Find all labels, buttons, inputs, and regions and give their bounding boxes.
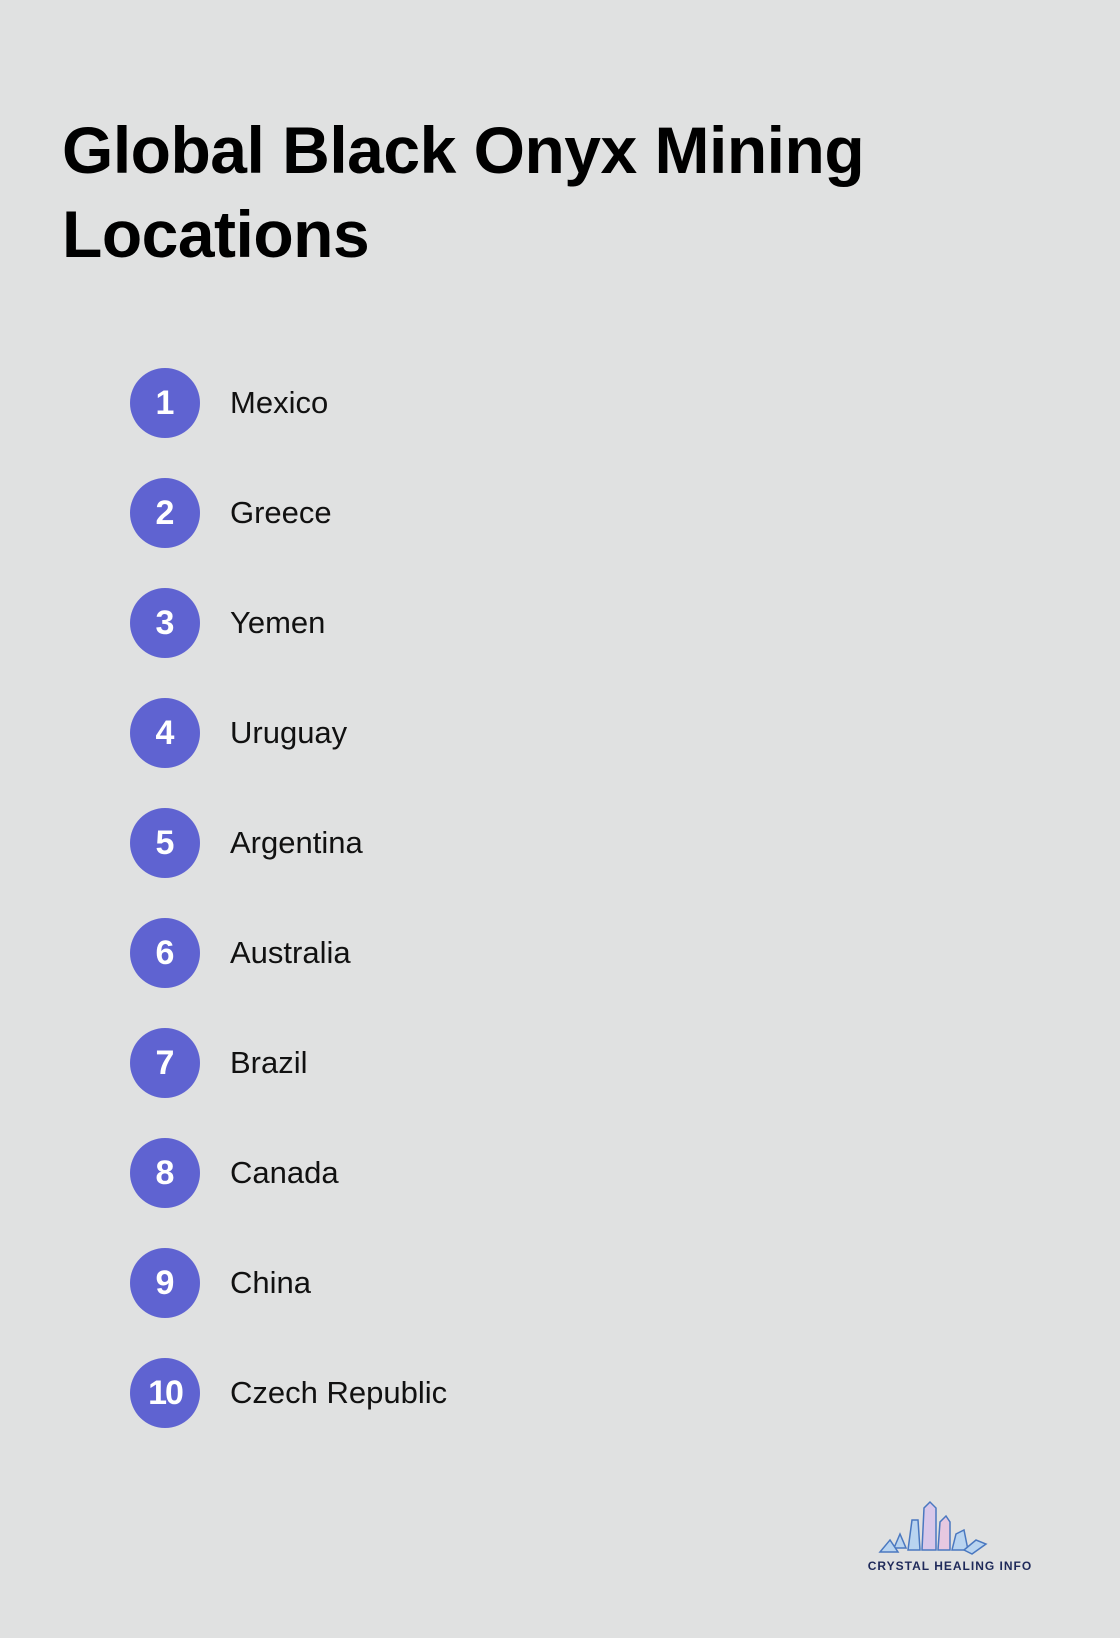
list item 5: Argentina: [230, 825, 363, 860]
list item 3: 3: [156, 604, 174, 642]
list item 6: 6: [156, 934, 174, 972]
list item 2: [130, 478, 332, 548]
list item 3: [130, 588, 325, 658]
list item 1: [130, 368, 328, 438]
logo: crystal healing info: [868, 1501, 1032, 1573]
list item 10: 10: [148, 1374, 182, 1412]
list item 8: 8: [156, 1154, 174, 1192]
list item 4: [130, 698, 347, 768]
list item 7: [130, 1028, 308, 1098]
list item 7: Brazil: [230, 1045, 308, 1080]
list item 9: 9: [156, 1264, 174, 1302]
list item 10: Czech Republic: [230, 1375, 447, 1410]
list item 1: 1: [156, 384, 174, 422]
list item 10: [130, 1358, 447, 1428]
list item 9: [130, 1248, 311, 1318]
list item 6: Australia: [230, 935, 351, 970]
title: [62, 113, 864, 271]
list item 7: 7: [156, 1044, 174, 1082]
title: Locations: [62, 197, 369, 271]
list item 5: 5: [156, 824, 174, 862]
list item 5: [130, 808, 363, 878]
list item 1: Mexico: [230, 385, 328, 420]
logo: crystal healing info: CRYSTAL HEALING INFO: [868, 1559, 1032, 1573]
list item 6: [130, 918, 351, 988]
list item 8: [130, 1138, 339, 1208]
list item 4: Uruguay: [230, 715, 347, 750]
list item 8: Canada: [230, 1155, 339, 1190]
list item 2: 2: [156, 494, 174, 532]
title: Global Black Onyx Mining: [62, 113, 864, 187]
list item 2: Greece: [230, 495, 332, 530]
list item 9: China: [230, 1265, 311, 1300]
list item 4: 4: [156, 714, 174, 752]
list item 3: Yemen: [230, 605, 325, 640]
